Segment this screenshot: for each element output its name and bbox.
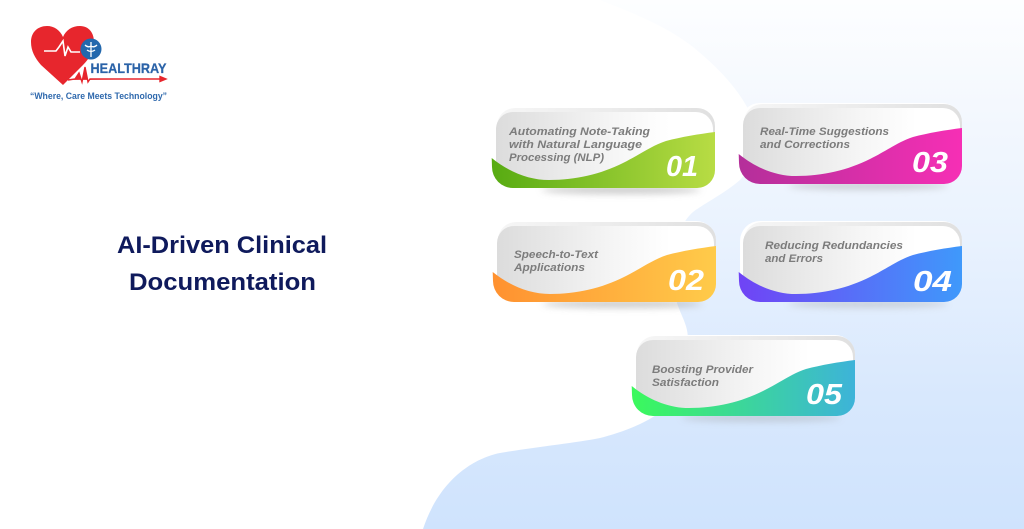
card 01: 01 [666, 151, 698, 183]
card 05: 05 [806, 379, 843, 411]
logo tagline: “Where, Care Meets Technology” [30, 91, 167, 102]
card 02: Applications [513, 262, 585, 274]
card 04 [739, 221, 962, 308]
card 03 [739, 103, 962, 190]
card 05: Satisfaction [652, 377, 719, 389]
icon: heartbeat line [44, 41, 80, 56]
card 02: Speech-to-Text [514, 249, 599, 261]
card 02: 02 [668, 265, 704, 297]
card 04: Reducing Redundancies [765, 240, 903, 252]
card 02 [493, 221, 716, 308]
card 01: Processing (NLP) [509, 152, 604, 164]
icon: heart [31, 26, 94, 85]
title [117, 232, 327, 296]
title: AI-Driven Clinical [117, 232, 327, 259]
card 05: Boosting Provider [652, 364, 754, 376]
card 03: and Corrections [760, 139, 850, 151]
background blue wave [423, 0, 1024, 529]
card 04: and Errors [765, 253, 823, 265]
card 05 [632, 335, 855, 422]
icon: caduceus badge [80, 38, 102, 60]
logo wordmark: HEALTHRAY [90, 60, 167, 76]
card 01 [492, 107, 715, 194]
card 01: Automating Note-Taking [508, 126, 650, 138]
logo: Healthray [30, 26, 167, 102]
icon: red pulse arrow [68, 67, 166, 82]
card 03: 03 [912, 147, 948, 179]
card 04: 04 [913, 266, 952, 298]
title: Documentation [129, 269, 316, 296]
card 03: Real-Time Suggestions [760, 126, 889, 138]
card 01: with Natural Language [509, 139, 642, 151]
